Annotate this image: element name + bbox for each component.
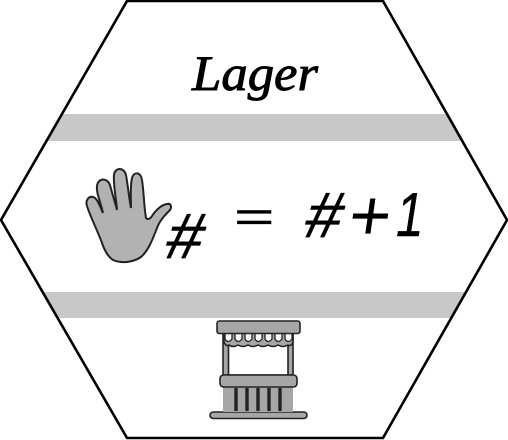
- bottom grey band: [44, 292, 464, 318]
- top grey band: [48, 114, 461, 141]
- stall posts and window: [223, 333, 293, 375]
- formula plus: +: [344, 176, 397, 256]
- stall foot: [210, 412, 307, 418]
- stall awning: [224, 333, 293, 346]
- icon: hand: [86, 169, 171, 262]
- stall base slots: [236, 388, 280, 411]
- hand subscript: #: [160, 200, 213, 272]
- stall counter: [220, 375, 297, 387]
- stall base: [223, 387, 293, 412]
- awning scallops: [225, 334, 292, 342]
- icon: market stall: [210, 321, 307, 418]
- formula equals: =: [234, 193, 274, 241]
- formula hash: #: [299, 179, 352, 251]
- formula one: 1: [396, 180, 424, 249]
- title: Lager: [191, 45, 319, 101]
- stall roof: [217, 321, 300, 334]
